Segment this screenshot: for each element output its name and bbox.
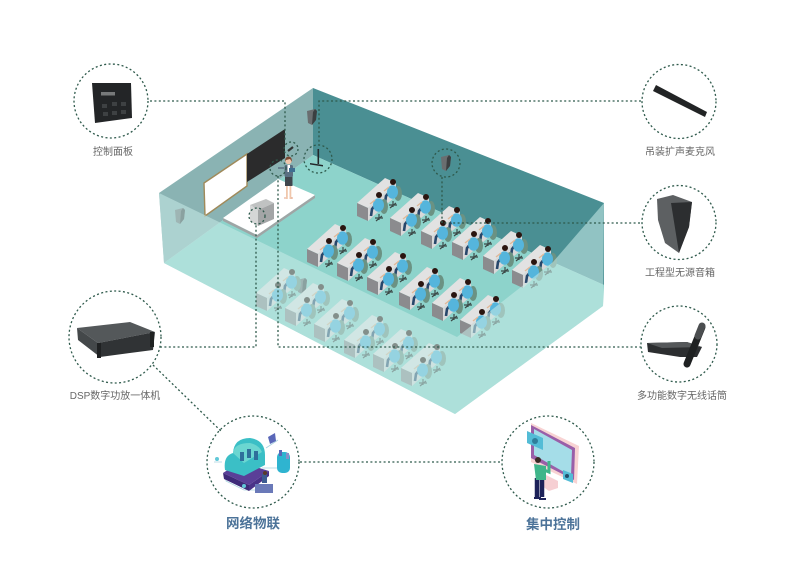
topic: network IoT bbox=[207, 416, 299, 531]
floor bbox=[164, 155, 604, 414]
transparent front walls bbox=[159, 193, 604, 414]
label: 工程型无源音箱 bbox=[645, 266, 715, 279]
classroom: 3D room bbox=[159, 88, 604, 414]
wall speaker: left wall bbox=[175, 208, 185, 224]
connector lines bbox=[150, 101, 641, 462]
front student rows bbox=[256, 268, 446, 386]
DSP rack on platform bbox=[250, 199, 274, 226]
icon: wall control panel bbox=[92, 83, 132, 123]
wall speaker: back corner bbox=[307, 109, 317, 125]
icon: network cloud bbox=[214, 433, 290, 493]
floor microphone stand bbox=[310, 149, 323, 166]
icon: receiver and handheld mic bbox=[647, 326, 702, 364]
teacher bbox=[278, 156, 295, 199]
icon: speaker cabinet bbox=[657, 195, 692, 253]
title: 集中控制 bbox=[526, 516, 580, 532]
whiteboard bbox=[204, 154, 247, 216]
device: passive speaker bbox=[642, 186, 716, 279]
device: hanging microphone bbox=[642, 64, 716, 158]
icon: microphone bar bbox=[653, 85, 707, 117]
rear student rows bbox=[357, 178, 557, 288]
device: control panel bbox=[74, 64, 148, 158]
left wall bbox=[159, 88, 313, 263]
blackboard bbox=[247, 129, 285, 182]
back wall bbox=[313, 88, 604, 285]
topic: centralized control bbox=[502, 416, 594, 532]
label: 吊装扩声麦克风 bbox=[645, 145, 715, 158]
device: DSP amplifier bbox=[69, 291, 161, 402]
label: DSP数字功放一体机 bbox=[70, 389, 160, 402]
device: wireless microphone bbox=[637, 306, 727, 402]
teacher platform bbox=[223, 179, 315, 238]
hanging microphone small bbox=[288, 147, 293, 151]
title: 网络物联 bbox=[226, 515, 280, 531]
label: 控制面板 bbox=[93, 145, 133, 158]
middle student rows bbox=[307, 224, 505, 338]
icon: rack amplifier bbox=[77, 322, 155, 358]
label: 多功能数字无线话筒 bbox=[637, 389, 727, 402]
icon: person at touch screen bbox=[527, 423, 579, 499]
wall speaker: right of back wall bbox=[441, 155, 451, 171]
